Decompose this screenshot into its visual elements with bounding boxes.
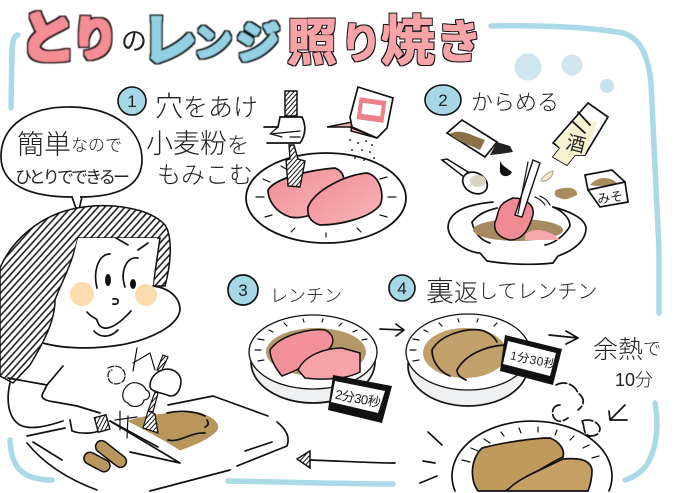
title: ジ <box>236 19 280 68</box>
step 1 <box>118 87 406 243</box>
arrow: step 4 to resting <box>549 331 578 344</box>
number badge 1 <box>118 87 146 115</box>
flour packet <box>327 87 393 161</box>
title: り <box>340 20 382 67</box>
knife <box>110 421 180 463</box>
plate with chicken <box>246 153 406 243</box>
face <box>43 238 180 348</box>
resting text: 10分 <box>615 370 653 390</box>
cheeks <box>70 282 94 306</box>
title: の <box>121 26 147 56</box>
step 4 text: 裏返 <box>426 276 478 307</box>
title: と <box>20 7 76 70</box>
steam <box>553 383 600 436</box>
sliced pieces <box>82 438 129 474</box>
speech bubble: 簡単 <box>17 130 71 160</box>
arrow: step 3 to 4 <box>380 324 404 336</box>
character: woman cutting chicken <box>0 206 288 491</box>
chicken on board <box>128 412 218 450</box>
number badge 4 <box>389 275 415 301</box>
resting text: 余熱 <box>593 336 643 364</box>
title: き <box>436 16 482 68</box>
speech bubble: なので <box>71 136 122 155</box>
step 1 text <box>146 91 258 189</box>
steam and motion marks <box>115 348 155 438</box>
step 2 text: からめる <box>471 90 559 115</box>
cutting board <box>27 396 288 491</box>
timer 2:30: 2分30秒 <box>334 387 382 410</box>
sake bottle <box>553 103 608 165</box>
miso drop and box <box>541 170 628 207</box>
motion lines <box>420 432 442 483</box>
timer 1:30: 1分30秒 <box>509 348 557 372</box>
number badge 2 <box>425 85 461 115</box>
title: ン <box>194 23 232 65</box>
number badge 3 <box>228 275 258 305</box>
finished chicken plate <box>452 421 612 491</box>
title: 照 <box>287 15 337 71</box>
eyes, nose, mouth <box>87 238 148 336</box>
arrow: down to finished dish <box>609 405 627 420</box>
title: 焼 <box>381 12 435 72</box>
step 1 text: 小麦粉を <box>146 129 249 159</box>
number badge 4: 4 <box>397 279 407 298</box>
resting text: で <box>643 339 661 359</box>
decorative blue dots <box>514 54 614 93</box>
bowl with chicken and chopsticks <box>448 160 586 264</box>
step 3 <box>228 275 392 423</box>
timer 2:30 <box>328 375 392 423</box>
covered dish with raw chicken <box>249 315 377 403</box>
step 3 text: レンチン <box>270 286 342 306</box>
title: レ <box>141 9 197 72</box>
step 2 <box>425 85 628 264</box>
speech bubble: ひとりでできるー <box>15 168 130 187</box>
spoon <box>442 159 491 198</box>
timer 1:30 <box>500 335 562 385</box>
number badge 2: 2 <box>438 91 448 110</box>
number badge 3: 3 <box>238 281 248 300</box>
miso drop and box: みそ <box>596 188 624 207</box>
number badge 1: 1 <box>127 92 137 111</box>
title <box>20 7 482 72</box>
speech bubble <box>1 107 142 214</box>
step 4 text: してレンチン <box>478 281 597 303</box>
resting text <box>593 336 661 390</box>
hair <box>0 206 170 383</box>
sake bottle: 酒 <box>564 132 588 157</box>
step 4 <box>389 275 597 406</box>
body and arm <box>8 366 100 433</box>
fork and hand <box>157 355 168 372</box>
step 1 text: もみこむ <box>157 162 253 189</box>
arrow: back to the cutting board <box>297 451 395 468</box>
hand holding fork <box>264 91 305 187</box>
title: り <box>72 13 118 65</box>
sauce tube <box>447 120 513 176</box>
covered dish with browned chicken <box>406 314 530 406</box>
step 1 text: 穴をあけ <box>155 91 258 122</box>
